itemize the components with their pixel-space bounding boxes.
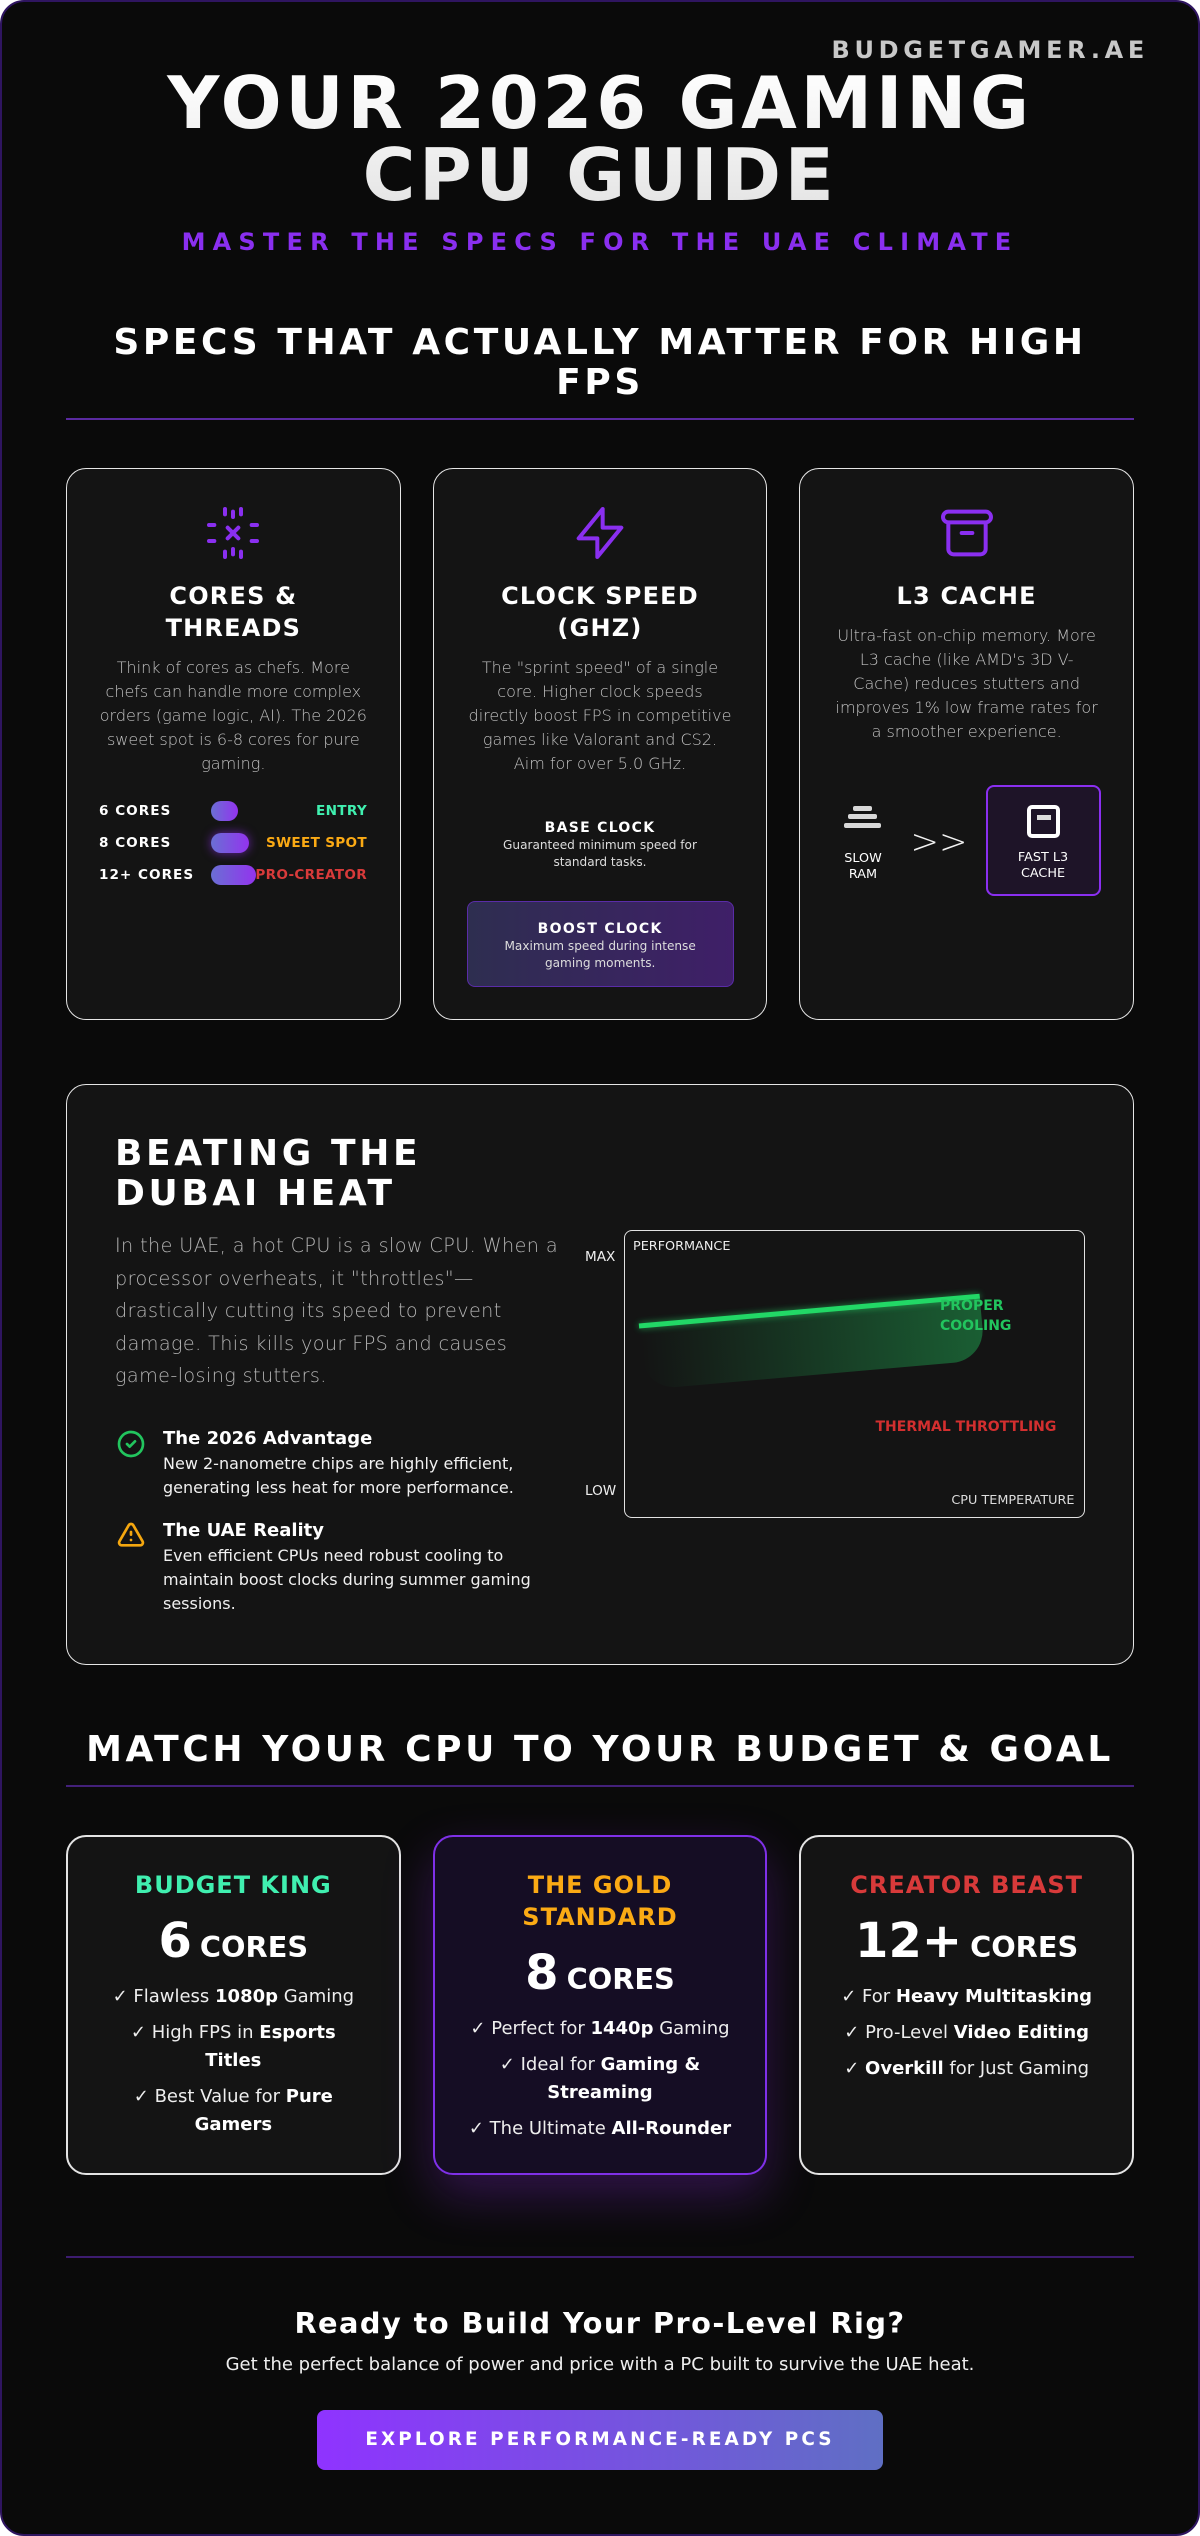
description xyxy=(836,626,1098,741)
feature list: ✓ Best Value for Pure xyxy=(134,2086,333,2107)
description xyxy=(100,658,367,773)
description xyxy=(469,658,731,773)
tier name: CREATOR BEAST xyxy=(850,1871,1083,1899)
boost clock box xyxy=(467,901,734,987)
description: improves 1% low frame rates for xyxy=(836,698,1098,717)
card heading xyxy=(166,582,301,642)
slow ram comparison xyxy=(844,806,882,882)
tier name: STANDARD xyxy=(522,1903,678,1931)
tier name: BUDGET KING xyxy=(135,1871,332,1899)
card heading: CORES & xyxy=(169,582,297,610)
section heading: specs xyxy=(113,322,1087,403)
y-axis labels: MAX xyxy=(585,1249,615,1265)
description: Aim for over 5.0 GHz. xyxy=(514,754,686,773)
panel description xyxy=(115,1234,558,1387)
card heading xyxy=(501,582,699,642)
description: Cache) reduces stutters and xyxy=(853,674,1080,693)
boost clock box: Maximum speed during intense xyxy=(504,939,696,953)
point: uae reality xyxy=(118,1520,531,1613)
description: chefs can handle more complex xyxy=(106,682,361,701)
slow ram comparison: RAM xyxy=(849,867,877,882)
card heading: THREADS xyxy=(166,614,301,642)
description: a smoother experience. xyxy=(872,722,1062,741)
base clock: Guaranteed minimum speed for xyxy=(503,838,697,852)
feature list: Streaming xyxy=(547,2082,653,2103)
point: 2026 advantage xyxy=(118,1428,514,1497)
panel heading xyxy=(115,1132,421,1214)
feature list xyxy=(841,1986,1092,2079)
title: CPU GUIDE xyxy=(363,133,837,217)
core count: 6 CORES xyxy=(159,1913,308,1969)
panel heading: BEATING THE xyxy=(115,1132,421,1174)
feature list: Titles xyxy=(205,2050,261,2071)
panel: the gold standard xyxy=(433,1835,767,2175)
feature list: ✓ Pro-Level Video Editing xyxy=(844,2022,1089,2043)
greater-than arrows: >> xyxy=(910,822,967,862)
description: directly boost FPS in competitive xyxy=(469,706,731,725)
icon: warning triangle xyxy=(118,1522,144,1547)
panel: clock speed xyxy=(433,468,767,1020)
panel description: game-losing stutters. xyxy=(115,1364,327,1387)
base clock xyxy=(503,820,697,868)
description: sweet spot is 6-8 cores for pure xyxy=(107,730,360,749)
feature list: Gamers xyxy=(195,2114,272,2135)
call to action text: Get the perfect balance of power and price with a PC built to survive the UAE heat. xyxy=(226,2354,974,2375)
feature list: ✓ Overkill for Just Gaming xyxy=(844,2058,1089,2079)
panel description: damage. This kills your FPS and causes xyxy=(115,1332,507,1355)
footer divider xyxy=(66,2256,1134,2258)
core tier rows: ENTRY xyxy=(316,803,367,819)
description: L3 cache (like AMD's 3D V- xyxy=(860,650,1073,669)
core tier rows: 12+ CORES xyxy=(99,867,194,883)
icon: ram bars xyxy=(844,806,881,828)
feature list: ✓ The Ultimate All-Rounder xyxy=(469,2118,731,2139)
brand label: BUDGETGAMER.AE xyxy=(831,36,1149,64)
panel: beating the dubai heat: LOW xyxy=(585,1483,616,1499)
section heading: specs: SPECS THAT ACTUALLY MATTER FOR HIGH xyxy=(113,322,1087,363)
point: uae reality: sessions. xyxy=(163,1594,236,1613)
call to action button xyxy=(317,2410,883,2470)
core tier rows: 8 CORES xyxy=(99,835,171,851)
core tier rows: SWEET SPOT xyxy=(266,835,367,851)
panel: beating the dubai heat xyxy=(66,1084,1134,1665)
point: uae reality: maintain boost clocks during summer gaming xyxy=(163,1570,531,1589)
description: games like Valorant and CS2. xyxy=(483,730,717,749)
base clock: BASE CLOCK xyxy=(545,820,655,836)
icon: lightning bolt xyxy=(576,507,624,559)
icon: cache chip xyxy=(1027,805,1060,838)
feature list: ✓ Perfect for 1440p Gaming xyxy=(470,2018,730,2039)
card heading: CLOCK SPEED xyxy=(501,582,699,610)
heading underline xyxy=(66,418,1134,420)
fast cache box: FAST L3 xyxy=(1018,850,1068,865)
core tier rows xyxy=(99,801,367,885)
feature list xyxy=(113,1986,354,2135)
axis title: CPU TEMPERATURE xyxy=(951,1492,1074,1508)
fast cache box: CACHE xyxy=(1021,866,1065,881)
panel description: processor overheats, it "throttles"— xyxy=(115,1267,474,1290)
boost clock box: BOOST CLOCK xyxy=(538,921,663,937)
description: Ultra-fast on-chip memory. More xyxy=(837,626,1096,645)
subtitle: MASTER THE SPECS FOR THE UAE CLIMATE xyxy=(182,228,1018,256)
title: YOUR 2026 GAMING xyxy=(167,61,1033,145)
axis title: PERFORMANCE xyxy=(633,1238,730,1254)
description: orders (game logic, AI). The 2026 xyxy=(100,706,367,725)
core tier rows: PRO-CREATOR xyxy=(255,867,367,883)
curve label: COOLING xyxy=(940,1318,1011,1334)
chart: performance vs temperature xyxy=(624,1230,1085,1518)
core tier rows: 6 CORES xyxy=(99,803,171,819)
icon: processor xyxy=(207,507,259,559)
description: gaming. xyxy=(201,754,265,773)
point: 2026 advantage: New 2-nanometre chips are highly efficient, xyxy=(163,1454,513,1473)
icon: archive box xyxy=(941,510,993,556)
chart curve xyxy=(636,1290,984,1386)
section heading: specs: FPS xyxy=(556,362,644,403)
point: 2026 advantage: generating less heat for more performance. xyxy=(163,1478,514,1497)
feature list: ✓ High FPS in Esports xyxy=(131,2022,336,2043)
tier name xyxy=(522,1871,678,1931)
curve label: PROPER xyxy=(940,1298,1004,1314)
core count: 12+ CORES xyxy=(855,1913,1078,1969)
panel: budget king xyxy=(66,1835,401,2175)
panel description: In the UAE, a hot CPU is a slow CPU. When a xyxy=(115,1234,558,1257)
point: uae reality: Even efficient CPUs need robust cooling to xyxy=(163,1546,503,1565)
title xyxy=(0,67,1200,211)
curve label: THERMAL THROTTLING xyxy=(876,1418,1056,1434)
description: Think of cores as chefs. More xyxy=(117,658,350,677)
description: The "sprint speed" of a single xyxy=(482,658,718,677)
feature list: ✓ Ideal for Gaming & xyxy=(500,2054,700,2075)
boost clock box: gaming moments. xyxy=(545,956,655,970)
panel heading: DUBAI HEAT xyxy=(115,1172,396,1214)
section heading: match: MATCH YOUR CPU TO YOUR BUDGET & GOAL xyxy=(86,1728,1114,1770)
panel description: drastically cutting its speed to prevent xyxy=(115,1299,502,1322)
base clock: standard tasks. xyxy=(553,854,647,868)
panel: creator beast xyxy=(799,1835,1134,2175)
point: uae reality: The UAE Reality xyxy=(163,1520,324,1540)
fast cache box xyxy=(986,785,1101,896)
panel: cores and threads xyxy=(66,468,401,1020)
feature list: ✓ Flawless 1080p Gaming xyxy=(113,1986,354,2007)
point: 2026 advantage: The 2026 Advantage xyxy=(163,1428,372,1448)
feature list: ✓ For Heavy Multitasking xyxy=(841,1986,1092,2007)
heading underline xyxy=(66,1785,1134,1787)
description: core. Higher clock speeds xyxy=(497,682,703,701)
call to action heading: Ready to Build Your Pro-Level Rig? xyxy=(294,2306,906,2340)
curve label xyxy=(940,1298,1011,1334)
call to action button: EXPLORE PERFORMANCE-READY PCS xyxy=(365,2429,835,2450)
card heading: (GHZ) xyxy=(557,614,643,642)
slow ram comparison: SLOW xyxy=(844,851,882,866)
icon: check circle xyxy=(118,1430,144,1458)
tier name: THE GOLD xyxy=(528,1871,672,1899)
card heading: L3 CACHE xyxy=(897,582,1037,610)
feature list xyxy=(469,2018,732,2139)
panel: l3 cache xyxy=(799,468,1134,1020)
core count: 8 CORES xyxy=(525,1945,675,2001)
